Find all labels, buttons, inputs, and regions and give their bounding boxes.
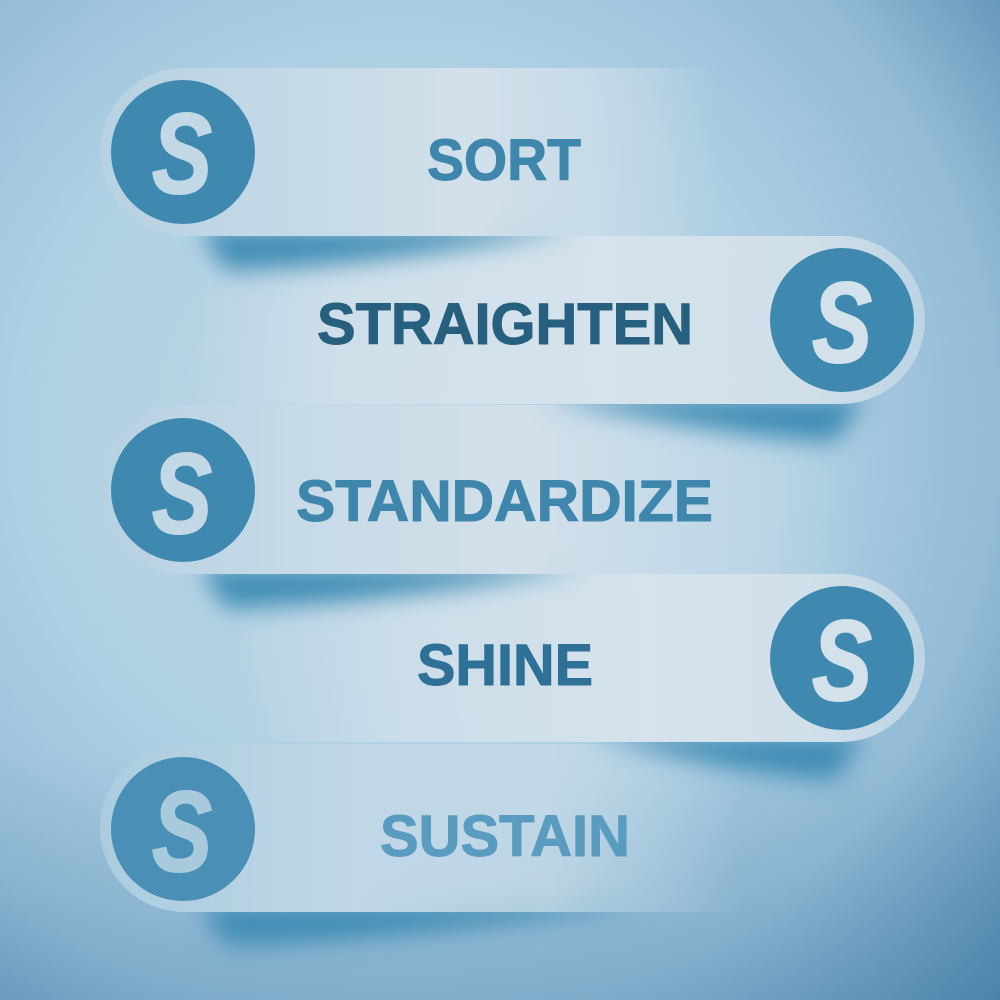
label: shine: SHINE <box>417 633 593 698</box>
shadow: sustain <box>200 905 650 946</box>
icon: S badge: S <box>812 260 872 387</box>
label: sort: SORT <box>427 128 581 193</box>
shadow: shine <box>590 736 865 780</box>
icon: S badge: S <box>152 91 212 218</box>
icon: S badge: S <box>812 598 872 725</box>
panel: shine <box>100 574 925 742</box>
shadow: sort <box>200 229 580 270</box>
icon: S badge <box>770 586 914 730</box>
icon: S badge <box>111 418 255 562</box>
label: standardize: STANDARDIZE <box>296 469 713 534</box>
icon: S badge <box>770 248 914 392</box>
panel: straighten <box>100 236 925 404</box>
icon: S badge <box>111 757 255 901</box>
panel: sort <box>100 68 800 236</box>
label: straighten: STRAIGHTEN <box>317 292 693 357</box>
icon: S badge: S <box>152 431 212 558</box>
panel: sustain <box>100 744 880 912</box>
panel: standardize <box>100 405 960 574</box>
label: sustain: SUSTAIN <box>380 804 630 869</box>
icon: S badge: S <box>152 769 212 896</box>
shadow: standardize <box>200 567 590 608</box>
shadow: straighten <box>540 398 865 442</box>
icon: S badge <box>111 80 255 224</box>
